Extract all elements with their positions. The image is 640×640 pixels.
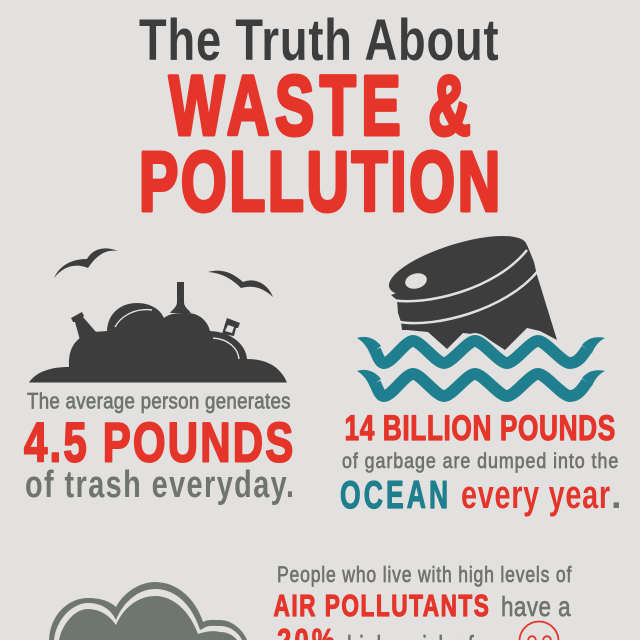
- title: [139, 9, 500, 229]
- text: air pollutants: People who live with high levels of: [277, 563, 572, 588]
- title: POLLUTION: [139, 135, 500, 229]
- text: ocean garbage: of garbage are dumped into the: [342, 450, 618, 473]
- text: trash per person: [24, 390, 294, 506]
- title: The Truth About: [139, 9, 499, 73]
- icon: right bottle: [222, 318, 240, 336]
- icon: upper wave: [357, 337, 605, 363]
- icon: lower wave: [357, 370, 605, 396]
- text: ocean garbage: [340, 408, 622, 517]
- icon: right bird: [208, 271, 273, 297]
- icon: tall bottle: [170, 282, 191, 313]
- icon: garbage pile with birds: [29, 248, 287, 382]
- text: trash per person: of trash everyday.: [25, 463, 294, 506]
- text: ocean garbage: OCEAN: [340, 474, 448, 517]
- icon: trash heap: [29, 303, 287, 382]
- text: air pollutants: [274, 563, 572, 640]
- title: WASTE &: [169, 59, 471, 153]
- icon: face in red circle: [520, 622, 558, 640]
- text: trash per person: The average person generates: [27, 390, 291, 414]
- icon: barrel: [383, 224, 557, 350]
- icon: left bird: [54, 248, 118, 278]
- text: air pollutants: AIR POLLUTANTS: [274, 587, 489, 623]
- icon: pollution cloud: [49, 582, 247, 640]
- text: ocean garbage: every year: [461, 472, 610, 517]
- text: ocean garbage: .: [611, 475, 622, 517]
- icon: sinking barrel in waves: [357, 224, 605, 396]
- text: trash per person: 4.5 POUNDS: [24, 412, 293, 474]
- text: air pollutants: have a: [501, 592, 571, 623]
- text: ocean garbage: 14 BILLION POUNDS: [344, 408, 615, 448]
- icon: left bottle: [71, 312, 96, 340]
